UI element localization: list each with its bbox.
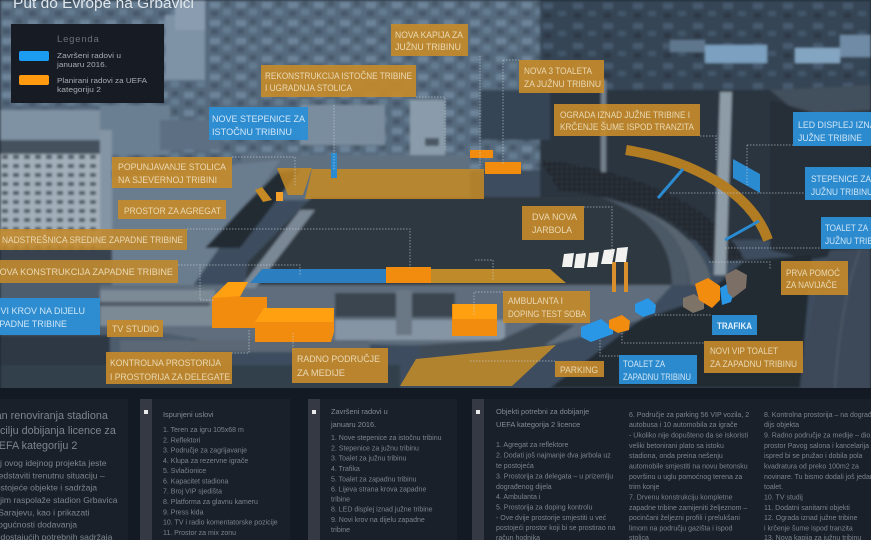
- panel: required facilities: 1. Agregat za reflektore: [496, 442, 568, 449]
- bottom information band: [0, 388, 871, 540]
- label: prva pomoć: [781, 261, 848, 295]
- label: rekonstrukcija: I UGRADNJA STOLICA: [265, 83, 353, 94]
- panel: required facilities: dograđenog dijela: [496, 484, 552, 491]
- panel: completed works: tribine: [331, 496, 350, 504]
- parking wedge: [400, 345, 556, 386]
- panel: required facilities: dijs objekta: [764, 422, 799, 429]
- panel: fulfilled conditions: 7. Broj VIP sjedišta: [163, 488, 222, 496]
- label: nova 3 toaleta: [519, 60, 604, 93]
- label: radno područje: [292, 348, 388, 383]
- highlighted construction zones: [212, 150, 768, 386]
- east stairs: [331, 153, 337, 178]
- panel: required facilities: 10. TV studij: [764, 494, 803, 502]
- led display: [733, 159, 760, 193]
- panel: required facilities: pocinčani željezni profili i prelukšani: [629, 515, 740, 522]
- east stand highlight: [305, 169, 484, 199]
- panel: fulfilled conditions: 4. Klupa za rezervne igrače: [163, 458, 248, 465]
- panel: required facilities: [472, 399, 871, 540]
- hill on the right: [770, 100, 871, 260]
- label: nadstrešnica: NADSTREŠNICA SREDINE ZAPADNE TRIBINE: [2, 235, 183, 246]
- label: prostor za agregat: PROSTOR ZA AGREGAT: [124, 206, 221, 217]
- label: nova kapija: NOVA KAPIJA ZA: [395, 30, 464, 41]
- label: led displej: JUŽNE TRIBINE: [798, 133, 862, 144]
- panel: required facilities: prostor Pavog salona i kancelarija: [764, 443, 869, 450]
- label: nova kapija: [391, 24, 468, 56]
- small orange block: [470, 150, 493, 158]
- label: popunjavanje: [112, 157, 232, 188]
- label: stepenice za južnu: [805, 167, 871, 200]
- label: tv studio: TV STUDIO: [112, 324, 159, 335]
- panel: required facilities: veliki betonirani plato sa istoku: [629, 443, 724, 450]
- panel: completed works: 9. Novi krov na dijelu zapadne: [331, 517, 425, 524]
- label: toalet za zapadnu: [619, 355, 697, 384]
- label: ambulanta: AMBULANTA I: [508, 296, 563, 307]
- label: toalet za južnu: [821, 217, 871, 249]
- label: nove stepenice: NOVE STEPENICE ZA: [212, 114, 306, 125]
- label: trafika: TRAFIKA: [717, 321, 752, 332]
- white reflectors: [562, 247, 628, 268]
- TV studio building: [212, 282, 267, 328]
- panel: completed works: 6. Lijeva strana krova zapadne: [331, 486, 426, 494]
- panel: required facilities: UEFA kategorija 2 licence: [496, 420, 580, 429]
- label: popunjavanje: NA SJEVERNOJ TRIBINI: [118, 175, 217, 186]
- label: prva pomoć: ZA NAVIJAČE: [786, 280, 837, 291]
- north-west stand: [205, 170, 300, 248]
- label: nove stepenice: ISTOČNU TRIBINU: [212, 127, 292, 138]
- panel: completed works: 4. Trafika: [331, 466, 360, 473]
- label: toalet za zapadnu: ZAPADNU TRIBINU: [623, 372, 691, 383]
- label: ograda: OGRADA IZNAD JUŽNE TRIBINE I: [560, 110, 690, 121]
- label: dva nova jarbola: [522, 206, 584, 240]
- panel: required facilities: novinare. Tu bismo dodali još jedan: [764, 474, 871, 481]
- panel: required facilities: 7. Drvenu konstrukciju kompletne: [629, 494, 733, 502]
- label: ambulanta: [503, 291, 590, 323]
- label: novi krov: [0, 298, 100, 335]
- legend: [11, 24, 164, 103]
- panel: required facilities: kvadratura od preko 100m2 za: [764, 464, 859, 470]
- south fence arc: [626, 150, 768, 240]
- panel: required facilities: 4. Ambulanta i: [496, 494, 541, 501]
- panel: required facilities: i krčenje šume ispod tranzita: [764, 526, 853, 532]
- label: nova 3 toaleta: ZA JUŽNU TRIBINU: [524, 79, 601, 90]
- legend: planned works: kategoriju 2: [57, 87, 101, 94]
- panel: completed works: januaru 2016.: [330, 420, 376, 429]
- panel: required facilities: 12. Ograda iznad južne tribine: [764, 515, 857, 522]
- label: radno područje: ZA MEDIJE: [297, 368, 345, 379]
- label: dva nova jarbola: DVA NOVA: [532, 212, 578, 223]
- panel: fulfilled conditions: 9. Press kida: [163, 510, 204, 516]
- panel: required facilities: 9. Radno područje za medije – dio: [764, 432, 870, 440]
- panel: required facilities: 2. Dodati još najmanje dva jarbola uz: [496, 452, 611, 460]
- west stand blue roof: [250, 269, 386, 283]
- label: kontrolna prostorija: I PROSTORIJA ZA DELEGATE: [110, 372, 230, 383]
- west stand and roof: [100, 285, 672, 345]
- three toilets: [485, 162, 521, 174]
- panel: fulfilled conditions: 8. Platforma za glavnu kameru: [163, 499, 258, 506]
- panel: required facilities: automobile smjestiti na novu betonsku: [629, 464, 748, 470]
- stadium field: [245, 197, 672, 285]
- panel: completed works: 2. Stepenice za južnu tribinu: [331, 446, 419, 452]
- west roof orange: [386, 267, 431, 283]
- dotted leader lines: [178, 56, 821, 361]
- panel: required facilities: - Ove dvije prostorije smjestiti u već: [496, 515, 607, 522]
- panel: required facilities: trim konje: [629, 484, 659, 491]
- label: led displej: [793, 112, 871, 146]
- label: kontrolna prostorija: [106, 352, 232, 384]
- aggregate icon: [276, 192, 283, 201]
- panel: completed works: tribine: [331, 527, 350, 534]
- floodlight masts: [612, 262, 616, 292]
- panel: fulfilled conditions: 1. Teren za igru 105x68 m: [163, 427, 244, 434]
- panel: completed works: 1. Nove stepenice za istočnu tribinu: [331, 435, 442, 442]
- label: prva pomoć: PRVA POMOĆ: [786, 268, 840, 279]
- label: nova konstrukcija: [0, 260, 178, 283]
- panel: completed works: 3. Toalet za južnu tribinu: [331, 456, 406, 462]
- label: prostor za agregat: [118, 200, 226, 219]
- panel: required facilities: autobusa i 10 automobila za igrače: [629, 422, 738, 429]
- label: ograda: [554, 104, 700, 136]
- label: parking: PARKING: [560, 365, 598, 376]
- panel: required facilities: 5. Prostorija za doping kontrolu: [496, 504, 593, 512]
- panel: required facilities: zapadne tribine zamijeniti željeznom –: [629, 505, 747, 512]
- panel: completed works: 8. LED displej iznad južne tribine: [331, 506, 433, 514]
- panel: required facilities: postojeći prostor koji bi se prostirao na: [496, 525, 616, 532]
- panel: fulfilled conditions: 5. Svlačionice: [163, 468, 206, 475]
- panel: completed works: Završeni radovi u: [331, 407, 388, 416]
- panel: fulfilled conditions: Ispunjeni uslovi: [163, 410, 214, 419]
- label: parking: [555, 361, 604, 377]
- panel: required facilities: Objekti potrebni za dobijanje: [496, 407, 589, 416]
- panel: required facilities: toalet.: [764, 484, 783, 491]
- legend: planned works: Planirani radovi za UEFA: [57, 78, 147, 85]
- panel: fulfilled conditions: [140, 399, 290, 540]
- panel: required facilities: 6. Područje za parking 56 VIP vozila, 2: [629, 412, 749, 419]
- toilet blocks and kiosks: [581, 319, 613, 342]
- label: popunjavanje: POPUNJAVANJE STOLICA: [118, 162, 227, 173]
- background photo: aerial view of the stadium: [0, 0, 871, 390]
- panel: required facilities: limom na području gazišta i ispod: [629, 526, 733, 532]
- label: nova 3 toaleta: NOVA 3 TOALETA: [524, 66, 593, 77]
- south stand crowd: [540, 160, 745, 262]
- tall floodlight masts: [714, 92, 732, 275]
- panel: required facilities: ispred bi se pružao i dobila pola: [764, 453, 863, 460]
- label: rekonstrukcija: [261, 65, 416, 97]
- panel: fulfilled conditions: 2. Reflektori: [163, 438, 201, 444]
- panel: required facilities: 11. Dodatni sanitarni objekti: [764, 505, 850, 512]
- south stairs: [658, 169, 683, 198]
- panel: fulfilled conditions: 6. Kapacitet stadiona: [163, 478, 228, 486]
- panel: required facilities: 3. Prostorija za delegata – u prizemlju: [496, 474, 613, 480]
- label: nadstrešnica: [0, 229, 187, 250]
- label: trafika: [712, 315, 757, 335]
- panel: renovation plan: [0, 399, 128, 540]
- legend: planned works: [19, 75, 147, 94]
- legend: completed works: Završeni radovi u: [57, 53, 121, 60]
- label: tv studio: [107, 320, 163, 337]
- label: kontrolna prostorija: KONTROLNA PROSTORIJA: [110, 358, 222, 369]
- panel: fulfilled conditions: 10. TV i radio komentatorske pozicije: [163, 520, 278, 526]
- label: rekonstrukcija: REKONSTRUKCIJA ISTOČNE TRIBINE: [265, 71, 412, 82]
- label: novi vip toalet: ZA ZAPADNU TRIBINU: [710, 359, 797, 370]
- panel: completed works: [308, 399, 457, 540]
- doping room building: [452, 304, 497, 336]
- label: novi vip toalet: NOVI VIP TOALET: [710, 346, 778, 357]
- label: dva nova jarbola: JARBOLA: [532, 225, 573, 236]
- label: toalet za zapadnu: TOALET ZA: [623, 359, 666, 370]
- label: radno područje: RADNO PODRUČJE: [297, 354, 380, 365]
- panel: completed works: 5. Toalet za zapadnu tribinu: [331, 476, 417, 484]
- label: nove stepenice: [209, 107, 308, 140]
- label: novi vip toalet: [704, 341, 803, 373]
- panel: fulfilled conditions: 3. Područje za zagrijavanje: [163, 448, 247, 454]
- media zone building: [255, 308, 334, 342]
- panel: required facilities: te postojeća: [496, 463, 534, 470]
- panel: required facilities: površinu u uglu pomoćnog terena za: [629, 474, 742, 481]
- label: ograda: KRČENJE ŠUME ISPOD TRANZITA: [560, 122, 695, 133]
- label: nova kapija: JUŽNU TRIBINU: [395, 42, 461, 53]
- panel: required facilities: - Ukoliko nije dopušteno da se iskoristi: [629, 432, 749, 440]
- legend: completed works: [19, 51, 121, 69]
- label: ambulanta: DOPING TEST SOBA: [508, 309, 587, 320]
- panel: fulfilled conditions: 11. Prostor za mix zonu: [163, 530, 236, 537]
- legend heading: Legenda: [57, 34, 100, 45]
- legend: completed works: januaru 2016.: [56, 62, 107, 69]
- panel: required facilities: stadiona, onda preina nešenju: [629, 453, 723, 460]
